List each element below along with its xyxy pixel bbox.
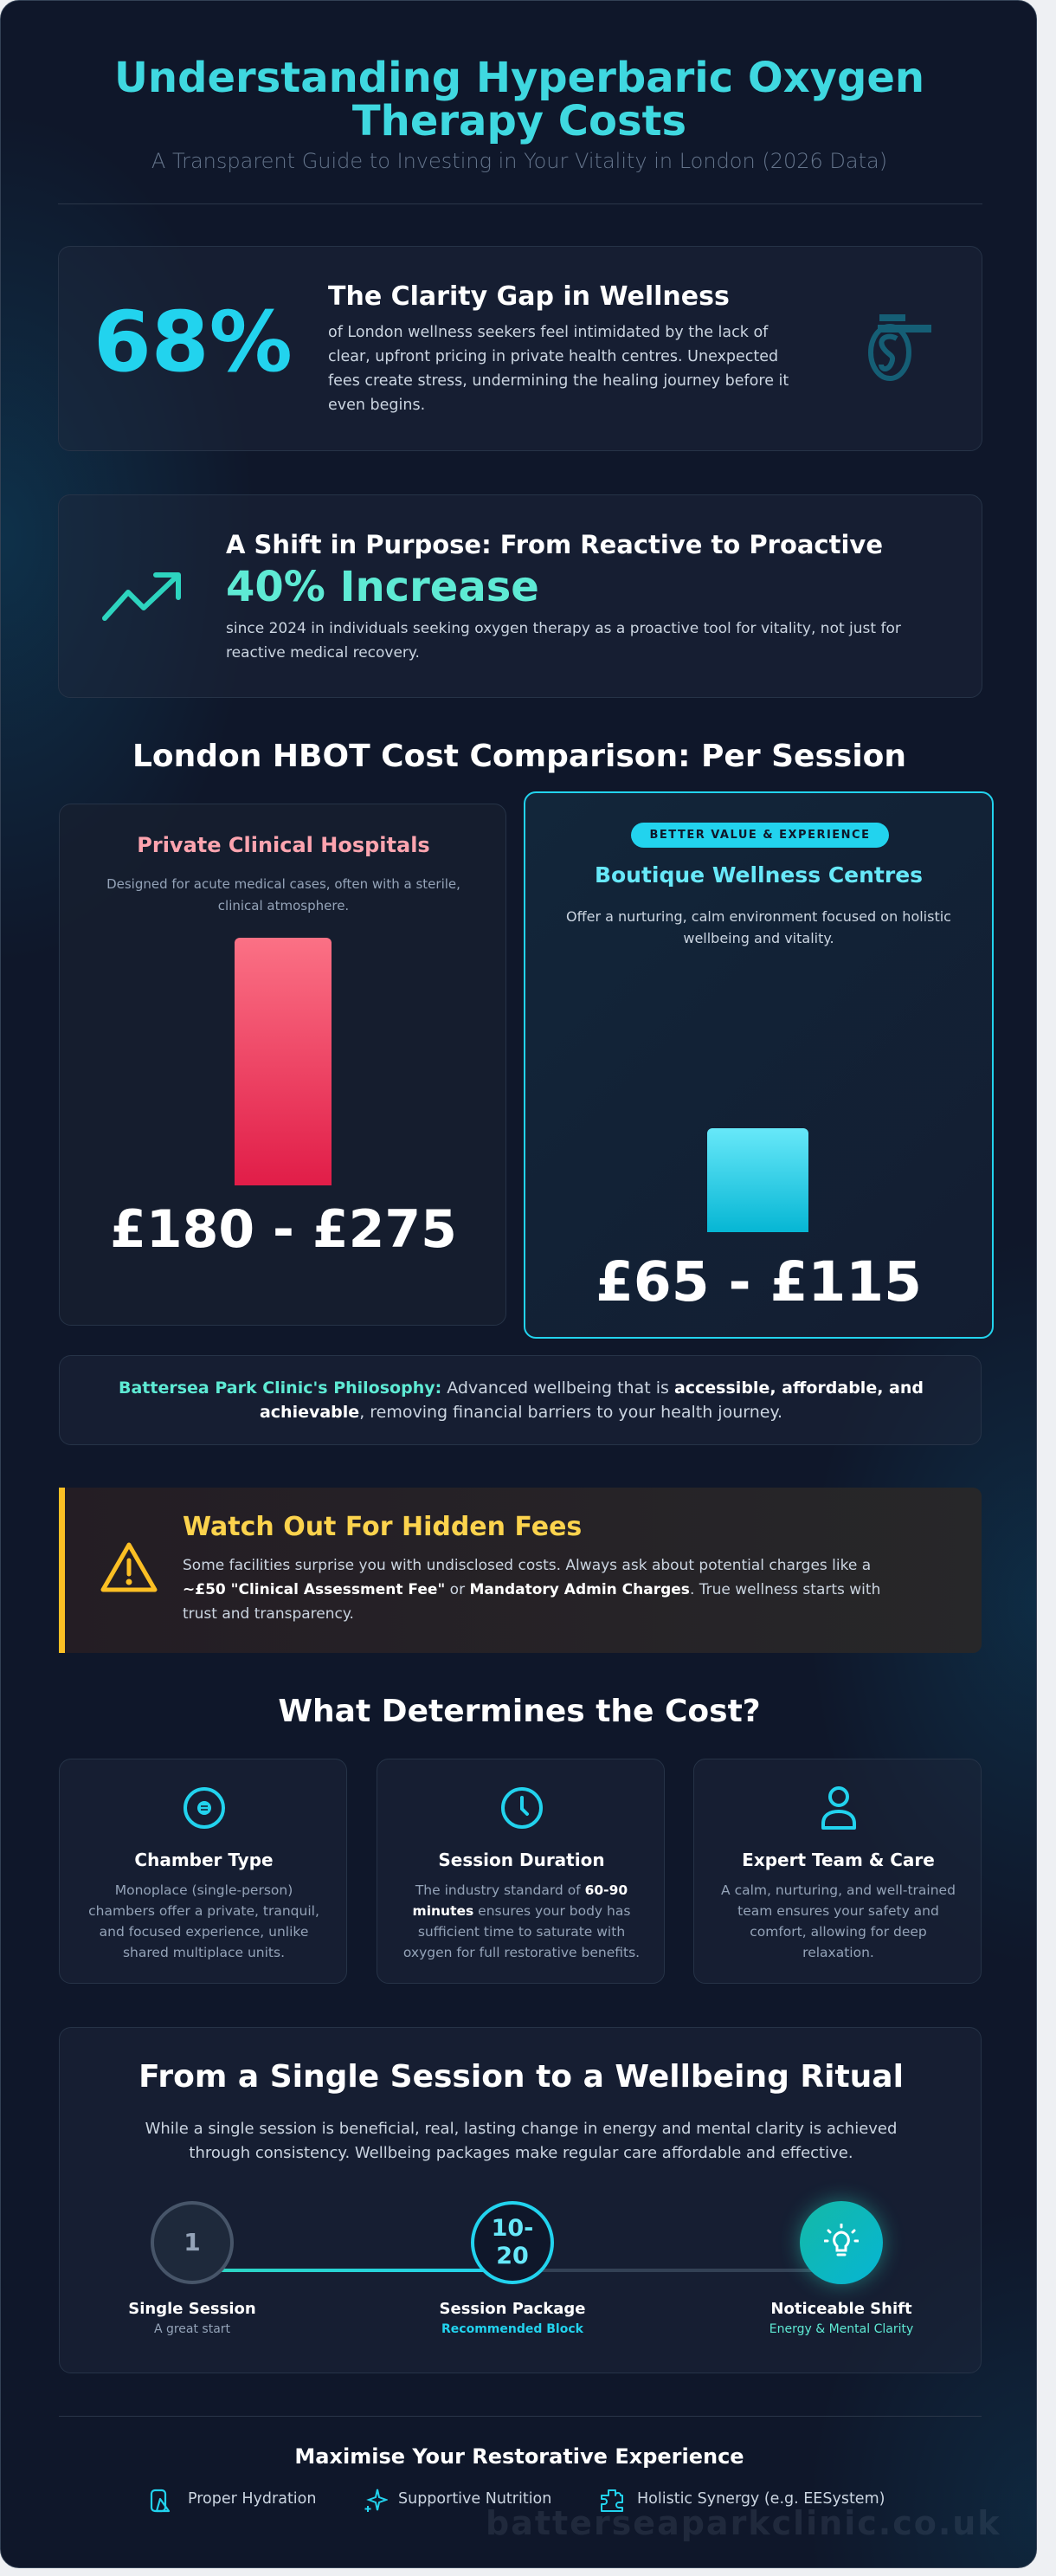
text: shift: since 2024 in individuals seeking oxygen therapy as a proactive tool for vitality, not just for reactive medical recovery.: [226, 620, 901, 662]
text: ritual: While a single session is beneficial, real, lasting change in energy and mental clarity is achieved through consistency. Wellbeing packages make regular care affordable and effective.: [145, 2120, 897, 2162]
step: session package: 20: [496, 2243, 529, 2269]
step: noticeable shift: Energy & Mental Clarity: [769, 2322, 913, 2336]
tip: synergy: [601, 2489, 885, 2512]
step: noticeable shift: [769, 2190, 913, 2336]
title: chamber: Chamber Type: [134, 1850, 274, 1870]
panel: wellbeing ritual: [59, 2027, 982, 2373]
heading: hidden fees: Watch Out For Hidden Fees: [183, 1512, 582, 1542]
heading: maximise: Maximise Your Restorative Experience: [294, 2444, 744, 2469]
desc: boutique: Offer a nurturing, calm environment focused on holistic wellbeing and vitality.: [566, 908, 951, 946]
tip: synergy: Holistic Synergy (e.g. EESystem): [637, 2490, 885, 2508]
desc: expert: A calm, nurturing, and well-trained team ensures your safety and comfort, allowing for deep relaxation.: [721, 1882, 956, 1960]
icon: chamber: [184, 1787, 225, 1829]
bar: private: [235, 938, 332, 1185]
heading: cost comparison: London HBOT Cost Comparison: Per Session: [132, 739, 906, 774]
panel: session duration: [377, 1759, 665, 1984]
heading: shift: A Shift in Purpose: From Reactive to Proactive: [226, 530, 883, 559]
desc: chamber: Monoplace (single-person) chambers offer a private, tranquil, and focused experience, unlike shared multiplace units.: [88, 1882, 319, 1960]
watermark: batterseaparkclinic.co.uk: [486, 2504, 1001, 2542]
icon: clock: [501, 1787, 543, 1829]
text: clarity gap: of London wellness seekers feel intimidated by the lack of clear, upfront pricing in private health centres. Unexpected fees create stress, undermining the healing journey before it even begins.: [328, 324, 789, 414]
tip: nutrition: [365, 2489, 551, 2512]
title: Understanding Hyperbaric Oxygen: [114, 54, 924, 102]
step: single session: [128, 2201, 256, 2336]
price: boutique: £65 - £115: [596, 1250, 922, 1314]
heading: ritual: From a Single Session to a Wellbeing Ritual: [138, 2059, 904, 2095]
step: single session: A great start: [154, 2322, 230, 2336]
panel: hidden fees warning: [59, 1488, 982, 1653]
icon: chamber: [868, 314, 931, 381]
panel: shift in purpose: [58, 494, 982, 698]
icon: person: [821, 1786, 856, 1830]
panel: clarity gap stat: [58, 246, 982, 451]
bar: boutique: [707, 1128, 808, 1232]
panel: chamber type: [59, 1759, 347, 1984]
timeline line: [192, 2269, 841, 2272]
callout: philosophy: [59, 1355, 982, 1445]
panel: expert team: [693, 1759, 982, 1984]
badge: BETTER VALUE & EXPERIENCE: [650, 829, 870, 842]
heading: clarity gap: The Clarity Gap in Wellness: [328, 281, 730, 312]
title: private: Private Clinical Hospitals: [137, 833, 430, 857]
tip: hydration: [151, 2489, 316, 2513]
icon: trending up: [102, 572, 181, 621]
step: single session: 1: [184, 2228, 201, 2256]
callout: philosophy: Battersea Park Clinic's Philosophy: Advanced wellbeing that is accessible, affordable, and achievable, removing financial barriers to your health journey.: [119, 1378, 924, 1422]
subtitle: A Transparent Guide to Investing in Your Vitality in London (2026 Data): [151, 149, 887, 173]
tip: nutrition: Supportive Nutrition: [398, 2490, 551, 2508]
stat: 40% increase: 40% Increase: [226, 563, 539, 611]
price: private: £180 - £275: [110, 1199, 457, 1260]
title: duration: Session Duration: [438, 1850, 605, 1870]
badge: [631, 823, 889, 848]
panel: private hospitals: [59, 804, 506, 1326]
heading: what determines cost: What Determines the Cost?: [278, 1694, 761, 1729]
step: session package: 10-: [492, 2215, 533, 2242]
desc: duration: The industry standard of 60-90 minutes ensures your body has sufficient time to saturate with oxygen for full restorative benefits.: [403, 1882, 640, 1960]
step: session package: Session Package: [440, 2300, 585, 2318]
title: [114, 54, 924, 145]
step: single session: Single Session: [128, 2300, 256, 2318]
text: hidden fees: Some facilities surprise you with undisclosed costs. Always ask about potential charges like a ~£50 "Clinical Assessment Fee" or Mandatory Admin Charges. True wellness starts with trust and transparency.: [183, 1557, 880, 1623]
step: session package: Recommended Block: [441, 2322, 583, 2336]
icon: warning: [100, 1543, 158, 1591]
panel: boutique centres: [524, 791, 994, 1339]
tip: hydration: Proper Hydration: [188, 2490, 316, 2508]
step: noticeable shift: Noticeable Shift: [770, 2300, 912, 2318]
title: expert: Expert Team & Care: [742, 1850, 935, 1870]
step: session package: [440, 2201, 585, 2336]
title: Therapy Costs: [352, 97, 686, 145]
desc: private: Designed for acute medical cases, often with a sterile, clinical atmosphere.: [106, 876, 460, 914]
title: boutique: Boutique Wellness Centres: [595, 862, 923, 888]
stat 68%: 68%: [93, 294, 293, 391]
tips list: [151, 2489, 885, 2513]
